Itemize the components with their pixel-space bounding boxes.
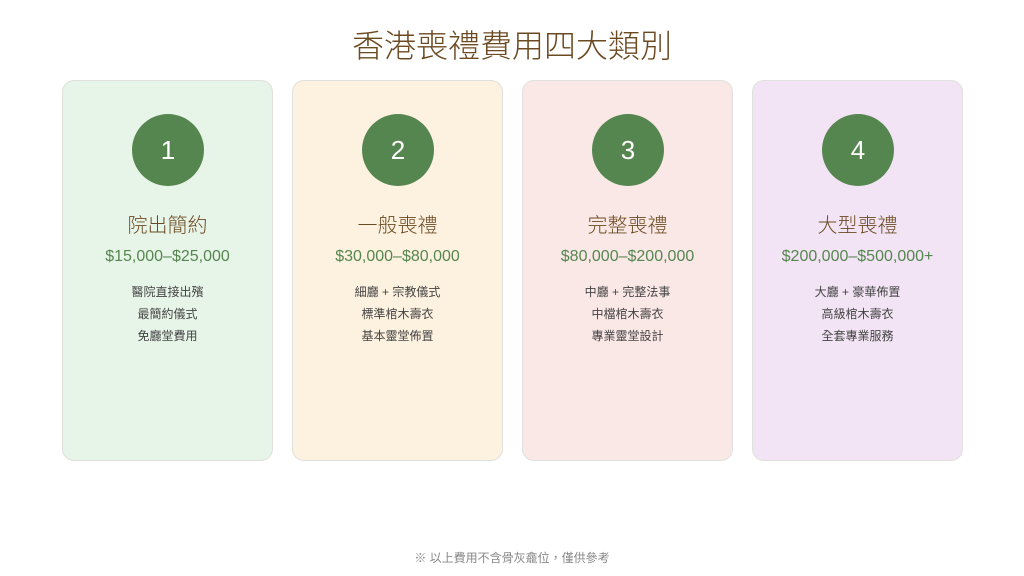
price 3: $80,000–$200,000 [561,248,694,265]
heading 1: 院出簡約 [128,215,208,237]
details 3 [585,285,670,343]
details 1 [131,285,204,343]
number badge 3 [592,114,664,186]
panel: card 3 [522,80,733,461]
details 1: 醫院直接出殯 [131,285,204,299]
details 2 [355,285,440,343]
number badge 3: 3 [621,135,635,165]
number badge 1 [132,114,204,186]
details 1: 免廳堂費用 [137,329,198,343]
price 1: $15,000–$25,000 [105,248,230,265]
details 1: 最簡約儀式 [137,307,198,321]
number badge 4 [822,114,894,186]
details 2: 標準棺木壽衣 [361,307,434,321]
footnote: ※ 以上費用不含骨灰龕位，僅供參考 [414,551,610,565]
number badge 2 [362,114,434,186]
details 4 [815,285,900,343]
details 3: 中檔棺木壽衣 [591,307,664,321]
number badge 1: 1 [161,135,175,165]
details 4: 大廳 + 豪華佈置 [815,285,900,299]
details 4: 全套專業服務 [821,329,894,343]
price 4: $200,000–$500,000+ [782,248,933,265]
panel: card 2 [292,80,503,461]
heading 3: 完整喪禮 [588,215,668,237]
panel: card 1 [62,80,273,461]
details 2: 細廳 + 宗教儀式 [355,285,440,299]
details 4: 高級棺木壽衣 [821,307,894,321]
price 2: $30,000–$80,000 [335,248,460,265]
heading 4: 大型喪禮 [818,215,898,237]
details 3: 專業靈堂設計 [591,329,664,343]
panel: card 4 [752,80,963,461]
number badge 4: 4 [851,135,865,165]
details 2: 基本靈堂佈置 [361,329,434,343]
number badge 2: 2 [391,135,405,165]
heading 2: 一般喪禮 [358,215,438,237]
details 3: 中廳 + 完整法事 [585,285,670,299]
title: 香港喪禮費用四大類別 [352,28,672,64]
